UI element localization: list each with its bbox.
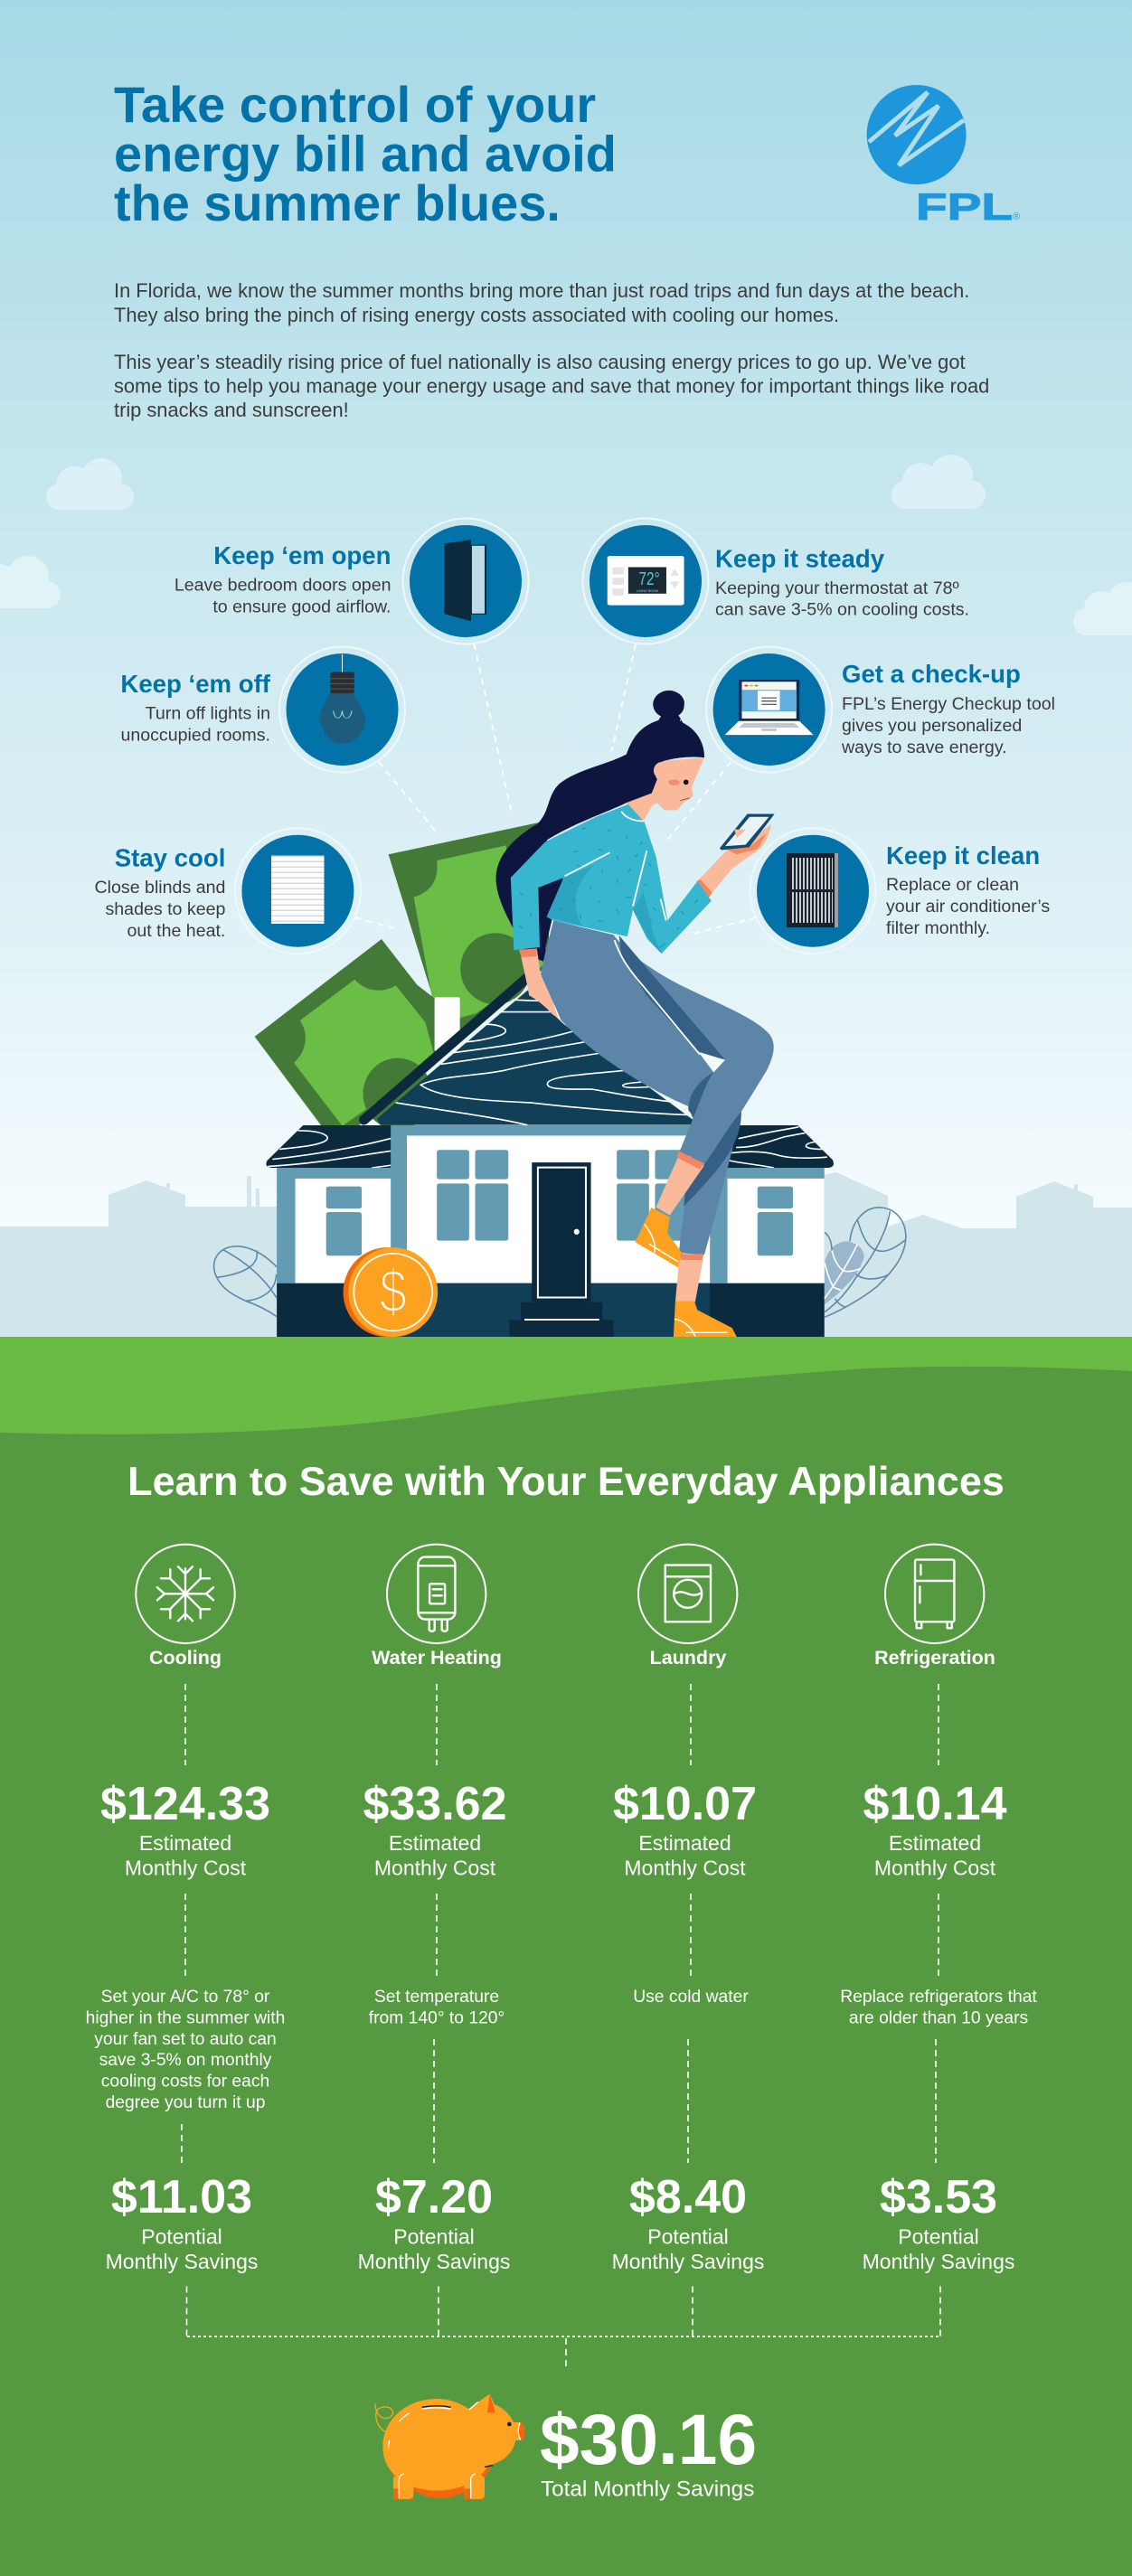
icon: thermostat circle: LIVING ROOM: [637, 589, 658, 593]
column: laundry: $10.07: [613, 1778, 757, 1830]
column: cooling: $11.03: [111, 2171, 252, 2223]
left arm: [519, 948, 568, 1020]
column: cooling: [86, 1545, 285, 2273]
tip: keep it steady: can save 3-5% on cooling costs.: [715, 600, 969, 620]
column: water heating: Water Heating: [372, 1647, 502, 1669]
intro paragraph 2: trip snacks and sunscreen!: [114, 399, 349, 421]
tip: stay cool: shades to keep: [105, 899, 225, 919]
icon: door circle: [403, 519, 528, 644]
cloud: lower left: [0, 556, 61, 608]
walls: [277, 1125, 825, 1283]
tip: keep it clean: Replace or clean: [886, 875, 1019, 895]
total savings: Total Monthly Savings: [541, 2477, 754, 2502]
skyline left: [0, 1176, 289, 1337]
icon: light bulb circle: [279, 647, 405, 772]
dark green savings panel: [0, 1367, 1132, 2576]
icon: thermostat circle: [582, 519, 709, 644]
column: laundry: [612, 1545, 764, 2273]
money bills behind house: [255, 821, 550, 1130]
icon: washing machine: [638, 1545, 737, 1643]
tip: keep 'em off: Turn off lights in: [146, 704, 270, 724]
tip: get a check-up: Get a check-up: [842, 660, 1021, 688]
column: cooling: Estimated: [139, 1831, 231, 1855]
tip: keep 'em off: Keep ‘em off: [120, 670, 271, 698]
intro paragraph 1: In Florida, we know the summer months bring more than just road trips and fun days at the beach.: [114, 279, 969, 302]
column: refrigeration: $3.53: [880, 2171, 997, 2223]
column: laundry: $8.40: [629, 2171, 747, 2223]
column: cooling: degree you turn it up: [106, 2093, 265, 2112]
trousers: [541, 920, 774, 1255]
tip: keep it clean: Keep it clean: [886, 841, 1040, 870]
gold coin: $: [380, 1257, 407, 1326]
column: refrigeration: Monthly Cost: [874, 1857, 996, 1880]
icon: refrigerator: [885, 1545, 984, 1643]
icon: piggy bank: [375, 2393, 525, 2499]
column: refrigeration: [840, 1545, 1037, 2273]
column: laundry: Monthly Cost: [624, 1857, 746, 1880]
tip: get a check-up: [841, 660, 1055, 757]
tip: get a check-up: ways to save energy.: [841, 738, 1007, 757]
intro paragraph 2: [114, 351, 989, 421]
title: the summer blues.: [114, 174, 561, 231]
right arm and phone: [696, 814, 775, 898]
tip: keep it steady: [715, 544, 969, 620]
intro paragraph 1: [114, 279, 969, 326]
column: cooling: Monthly Savings: [106, 2250, 258, 2273]
column: water heating: Estimated: [389, 1831, 481, 1855]
title: energy bill and avoid: [114, 125, 617, 183]
FPL logo: ®: [1013, 212, 1020, 222]
tip: keep it steady: Keep it steady: [715, 544, 885, 573]
tip: stay cool: Close blinds and: [95, 878, 225, 898]
intro paragraph 2: some tips to help you manage your energy usage and save that money for important things like road: [114, 374, 989, 398]
cloud: upper left: [46, 458, 134, 510]
cloud: lower right: [1073, 582, 1132, 635]
tip: keep it steady: Keeping your thermostat at 78º: [715, 578, 959, 598]
column: cooling: Monthly Cost: [125, 1857, 247, 1880]
column: cooling: higher in the summer with: [86, 2008, 285, 2027]
dashed connector lines: [354, 644, 757, 934]
column: laundry: Use cold water: [633, 1988, 749, 2007]
column: water heating: from 140° to 120°: [369, 2008, 505, 2027]
foundation: [277, 1283, 825, 1337]
column: cooling: save 3-5% on monthly: [99, 2051, 272, 2070]
total savings: $30.16: [540, 2400, 757, 2479]
column: laundry: Laundry: [650, 1647, 726, 1669]
gold coin: [344, 1247, 438, 1337]
teal shirt: [511, 804, 712, 954]
tip: keep it clean: [886, 841, 1050, 938]
icon: water heater: [387, 1545, 486, 1643]
column: refrigeration: Replace refrigerators that: [840, 1988, 1037, 2007]
tip: stay cool: out the heat.: [127, 921, 225, 941]
tip: keep 'em open: Keep ‘em open: [213, 541, 391, 569]
legs and shoes: [636, 1151, 737, 1337]
tip: stay cool: [95, 844, 225, 941]
title: Take control of your: [114, 76, 596, 133]
tip: keep it clean: your air conditioner’s: [886, 897, 1050, 917]
icon: air filter circle: [750, 828, 875, 954]
column: water heating: Monthly Savings: [358, 2250, 510, 2273]
column: water heating: [358, 1545, 510, 2273]
windows: [326, 1150, 793, 1255]
leaves right: [825, 1208, 906, 1317]
woman: body: [511, 804, 775, 1337]
icon: snowflake: [136, 1545, 235, 1643]
main roof: [364, 974, 700, 1125]
column: water heating: Potential: [393, 2225, 475, 2249]
column: refrigeration: Estimated: [889, 1831, 981, 1855]
hair behind torso: [536, 876, 563, 958]
column: refrigeration: Refrigeration: [874, 1647, 995, 1669]
column: refrigeration: are older than 10 years: [849, 2008, 1028, 2027]
column: cooling: cooling costs for each: [101, 2073, 269, 2092]
skyline right: [814, 1172, 1132, 1337]
column: laundry: Potential: [647, 2225, 729, 2249]
tip: stay cool: Stay cool: [115, 844, 225, 872]
leaves left: [214, 1246, 277, 1317]
column: refrigeration: $10.14: [863, 1778, 1007, 1830]
savings connector bracket: [186, 2287, 940, 2367]
tip: get a check-up: FPL’s Energy Checkup tool: [842, 694, 1055, 714]
column: water heating: Monthly Cost: [374, 1857, 496, 1880]
tip: keep 'em open: [175, 541, 391, 616]
column: cooling: your fan set to auto can: [94, 2030, 277, 2049]
column: refrigeration: Monthly Savings: [863, 2250, 1014, 2273]
column: laundry: Monthly Savings: [612, 2250, 764, 2273]
column: cooling: Set your A/C to 78° or: [101, 1988, 270, 2007]
FPL logo: FPL: [916, 185, 1013, 228]
house: [266, 974, 834, 1337]
tip: keep it clean: filter monthly.: [886, 918, 990, 938]
intro paragraph 2: This year’s steadily rising price of fuel nationally is also causing energy prices to go up. We’ve got: [114, 351, 966, 373]
column: water heating: $33.62: [363, 1778, 507, 1830]
column: cooling: Potential: [141, 2225, 222, 2249]
sky background: [0, 0, 1132, 1338]
section heading: Learn to Save with Your Everyday Appliances: [127, 1458, 1005, 1504]
column: water heating: Set temperature: [374, 1988, 499, 2007]
tip: keep 'em off: unoccupied rooms.: [120, 726, 270, 746]
FPL logo: [867, 85, 1020, 228]
column: water heating: $7.20: [375, 2171, 493, 2223]
woman: face: [627, 757, 704, 822]
tip: keep 'em open: to ensure good airflow.: [212, 597, 391, 616]
tip: get a check-up: gives you personalized: [842, 716, 1022, 736]
column: laundry: Estimated: [638, 1831, 731, 1855]
icon: laptop circle: [706, 647, 832, 772]
woman: hair: [496, 691, 704, 963]
tip: keep 'em off: [120, 670, 271, 746]
tip: keep 'em open: Leave bedroom doors open: [175, 576, 391, 596]
icon: blinds circle: [235, 828, 361, 954]
column: cooling: $124.33: [100, 1778, 270, 1830]
side roofs: [266, 1125, 834, 1168]
green lawn: [0, 1337, 1132, 1445]
title: [114, 76, 617, 231]
door and steps: [509, 1162, 614, 1337]
column: cooling: Cooling: [149, 1647, 222, 1669]
cloud: upper right: [891, 455, 986, 509]
intro paragraph 1: They also bring the pinch of rising energy costs associated with cooling our homes.: [114, 304, 839, 326]
icon: thermostat circle: 72°: [638, 569, 660, 589]
column: refrigeration: Potential: [898, 2225, 979, 2249]
